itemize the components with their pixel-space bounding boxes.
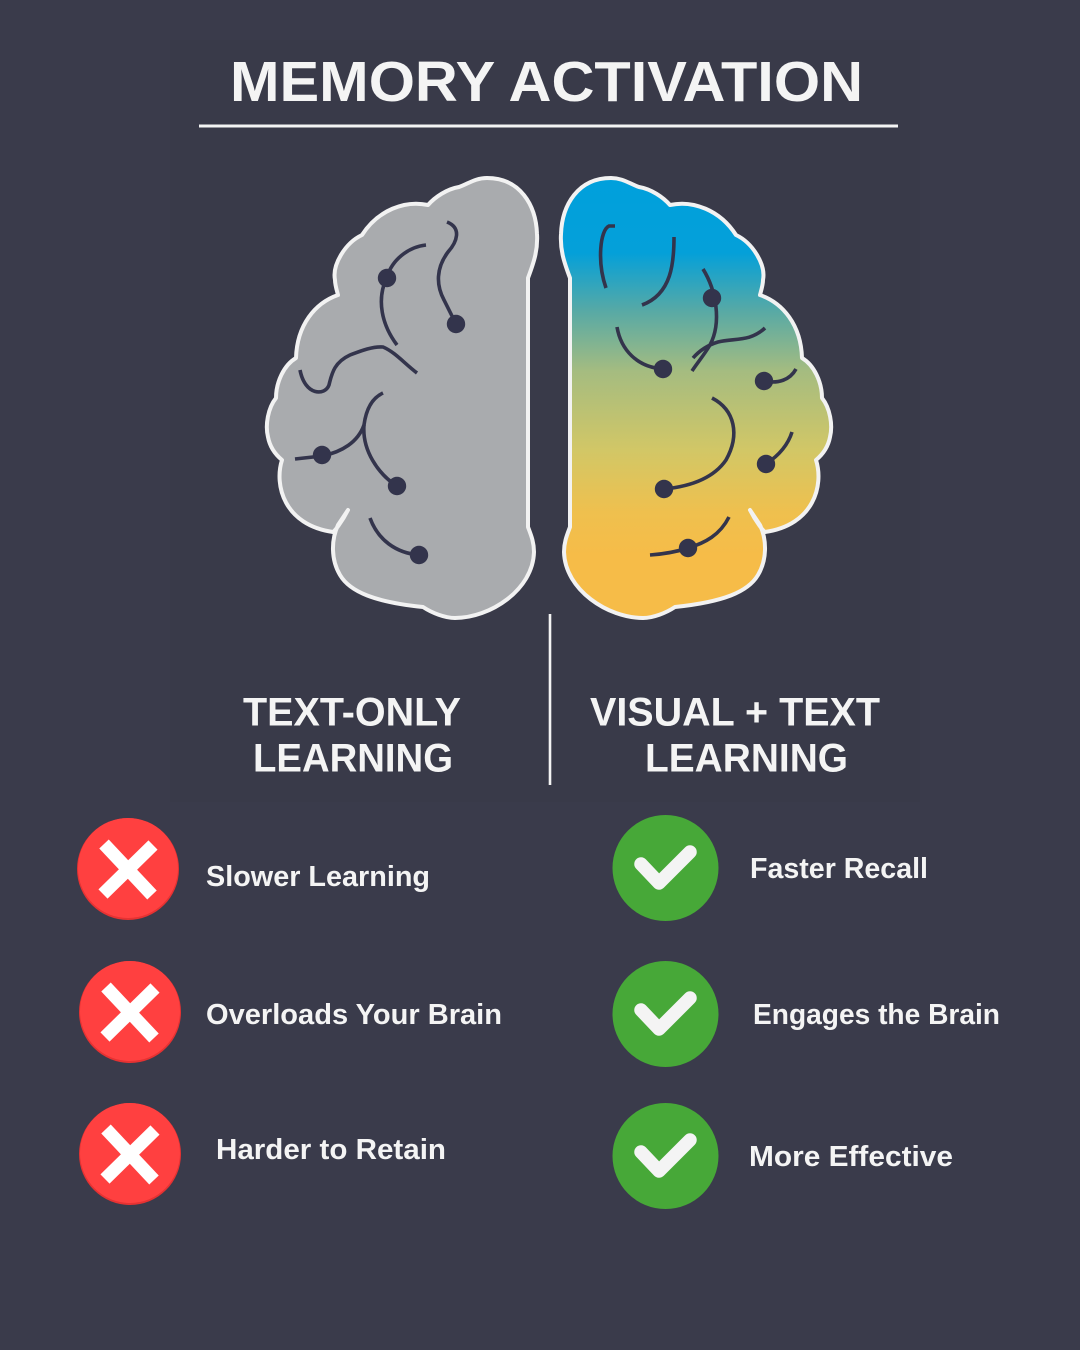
heading: visual + text learning: LEARNING bbox=[645, 736, 848, 780]
heading: text-only learning: LEARNING bbox=[253, 736, 453, 780]
label: engages the brain: Engages the Brain bbox=[753, 999, 1000, 1031]
centre divider bbox=[549, 614, 551, 785]
label: overloads your brain: Overloads Your Brain bbox=[206, 999, 502, 1031]
heading: visual + text learning bbox=[590, 690, 880, 780]
icon: red cross 3 bbox=[79, 1103, 181, 1205]
title underline bbox=[199, 124, 898, 128]
icon: red cross 2 bbox=[79, 961, 181, 1063]
label: slower learning: Slower Learning bbox=[206, 861, 430, 893]
label: more effective: More Effective bbox=[749, 1141, 953, 1173]
icon: green check 1 bbox=[612, 815, 718, 921]
right brain: coloured gradient, visual + text bbox=[561, 178, 831, 618]
icon: red cross 1 bbox=[77, 818, 179, 920]
icon: green check 2 bbox=[612, 961, 718, 1067]
icon: green check 3 bbox=[612, 1103, 718, 1209]
label: harder to retain: Harder to Retain bbox=[216, 1134, 446, 1166]
heading: visual + text learning: VISUAL + TEXT bbox=[590, 690, 880, 734]
left brain: grey, text-only bbox=[267, 178, 537, 618]
title: MEMORY ACTIVATION bbox=[230, 50, 863, 114]
heading: text-only learning bbox=[243, 690, 461, 780]
heading: text-only learning: TEXT-ONLY bbox=[243, 690, 461, 734]
label: faster recall: Faster Recall bbox=[750, 853, 928, 885]
